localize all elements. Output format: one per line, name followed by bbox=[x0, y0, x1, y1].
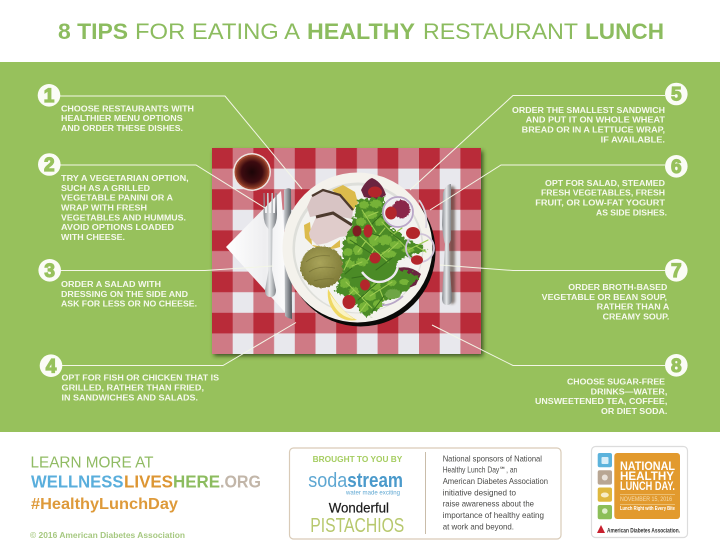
title: LUNCH bbox=[585, 19, 664, 44]
website address: WELLNESS bbox=[31, 471, 124, 491]
panel: green tips background bbox=[0, 62, 720, 432]
icon: knife bbox=[442, 184, 455, 305]
meat slice lower bbox=[309, 213, 353, 245]
tip 6 text bbox=[535, 178, 667, 218]
badge 2: 2 bbox=[44, 155, 55, 176]
tip 6 bbox=[535, 155, 688, 218]
tip 3 text: DRESSING ON THE SIDE AND bbox=[61, 289, 188, 299]
tip 8 text bbox=[535, 376, 667, 416]
tip 2 text bbox=[61, 173, 189, 242]
tip 4 text bbox=[62, 373, 219, 403]
napkin bbox=[226, 191, 291, 319]
tip 6 text: OPT FOR SALAD, STEAMED bbox=[545, 178, 665, 188]
badge 4: 4 bbox=[46, 356, 57, 377]
lettuce base bbox=[335, 198, 428, 318]
purple leaves bbox=[346, 178, 421, 292]
badge 1: 1 bbox=[44, 86, 55, 107]
tip 1 text: AND ORDER THESE DISHES. bbox=[61, 123, 183, 133]
title bbox=[58, 19, 664, 44]
tip 4 text: IN SANDWICHES AND SALADS. bbox=[62, 393, 198, 403]
illustration: table setting bbox=[212, 148, 483, 356]
logo card: National Healthy Lunch Day bbox=[592, 446, 688, 538]
tip 8 text: UNSWEETENED TEA, COFFEE, bbox=[535, 396, 667, 406]
logo: American Diabetes Association: American Diabetes Association. bbox=[607, 528, 680, 534]
learn more heading: LEARN MORE AT bbox=[30, 455, 154, 472]
panel: sponsors bbox=[290, 448, 561, 539]
badge 5 bbox=[665, 83, 688, 106]
tip 1 bbox=[38, 84, 194, 133]
icon: dinner knife beside napkin bbox=[284, 188, 292, 319]
tip 3 text bbox=[61, 279, 197, 309]
orange event panel: HEALTHY bbox=[620, 471, 674, 483]
tip 5 text bbox=[512, 105, 666, 144]
copyright: © 2016 American Diabetes Association bbox=[30, 531, 185, 540]
logo: sodastream: soda bbox=[308, 469, 348, 492]
meat slice upper bbox=[307, 190, 353, 219]
sponsors heading: BROUGHT TO YOU BY bbox=[313, 455, 403, 464]
badge 6: 6 bbox=[671, 157, 682, 178]
onion rings bbox=[362, 197, 434, 305]
tip 1 text: CHOOSE RESTAURANTS WITH bbox=[61, 103, 194, 113]
orange event panel: NATIONAL bbox=[620, 461, 675, 473]
badge 2 bbox=[38, 153, 61, 176]
sponsor description: importance of healthy eating bbox=[443, 511, 544, 520]
tip 4 text: OPT FOR FISH OR CHICKEN THAT IS bbox=[62, 373, 219, 383]
tip 8 bbox=[535, 354, 688, 416]
tomatoes bbox=[342, 186, 423, 309]
orange event panel: Lunch Right with Every Bite bbox=[620, 506, 675, 512]
tip 7 text: RATHER THAN A bbox=[597, 302, 669, 312]
footer: learn more bbox=[30, 455, 261, 540]
sponsor description: raise awareness about the bbox=[443, 500, 534, 509]
squash bbox=[304, 185, 358, 249]
tip 2 text: WRAP WITH FRESH bbox=[61, 202, 147, 212]
logo: sodastream: water made exciting bbox=[345, 490, 400, 496]
tip 3 bbox=[38, 259, 197, 309]
tip 4 text: GRILLED, RATHER THAN FRIED, bbox=[62, 383, 204, 393]
sponsor description: National sponsors of National bbox=[443, 454, 542, 463]
badge 5: 5 bbox=[671, 85, 682, 106]
badge 6 bbox=[665, 155, 688, 178]
tip 2 text: VEGETABLE PANINI OR A bbox=[61, 193, 173, 203]
tip 7 text bbox=[542, 282, 669, 321]
badge 1 bbox=[38, 84, 60, 107]
placemat bbox=[212, 148, 483, 356]
title: 8 TIPS bbox=[58, 19, 128, 44]
tip 2 text: SUCH AS A GRILLED bbox=[61, 183, 150, 193]
tip 2 text: WITH CHEESE. bbox=[61, 232, 125, 242]
icon: sauce cup bbox=[233, 153, 271, 191]
leader lines bbox=[58, 96, 665, 366]
potato mound bbox=[300, 246, 344, 288]
sponsor description: American Diabetes Association bbox=[443, 477, 548, 486]
food: salad bbox=[335, 178, 434, 318]
tip 4 bbox=[40, 354, 219, 403]
tip 5 bbox=[512, 83, 688, 144]
website address: HERE bbox=[173, 471, 220, 491]
sponsor description: initiative designed to bbox=[443, 488, 516, 497]
tip 5 text: AND PUT IT ON WHOLE WHEAT bbox=[526, 115, 666, 125]
tip 3 text: ASK FOR LESS OR NO CHEESE. bbox=[61, 299, 197, 309]
logo: wonderful pistachios: Wonderful bbox=[329, 501, 389, 516]
sponsor description: at work and beyond. bbox=[443, 523, 514, 532]
website address bbox=[31, 471, 261, 491]
badge 7 bbox=[665, 259, 688, 282]
sponsor description bbox=[443, 454, 548, 532]
icon: fork bbox=[264, 193, 277, 297]
badge 4 bbox=[40, 354, 62, 377]
tip 2 bbox=[38, 153, 189, 242]
tip 2 text: VEGETABLES AND HUMMUS. bbox=[61, 212, 186, 222]
logo: sodastream bbox=[308, 469, 403, 496]
plate bbox=[282, 172, 436, 326]
tip 1 text bbox=[61, 103, 194, 133]
cranberry bbox=[392, 200, 410, 218]
lemon wedge bbox=[328, 289, 357, 320]
tip 5 text: BREAD OR IN A LETTUCE WRAP, bbox=[522, 125, 665, 135]
arugula strokes bbox=[344, 210, 428, 312]
logo: wonderful pistachios: PISTACHIOS bbox=[310, 515, 404, 537]
tip 7 text: VEGETABLE OR BEAN SOUP, bbox=[542, 292, 667, 302]
tip 8 text: OR DIET SODA. bbox=[601, 406, 667, 416]
orange event panel: NOVEMBER 15, 2016 bbox=[620, 497, 673, 503]
tip 6 text: FRUIT, OR LOW-FAT YOGURT bbox=[535, 198, 666, 208]
badge 3 bbox=[38, 259, 61, 282]
title: FOR EATING A bbox=[135, 19, 300, 44]
divider bbox=[425, 452, 426, 534]
badge 7: 7 bbox=[671, 261, 682, 282]
tip 6 text: AS SIDE DISHES. bbox=[596, 208, 667, 218]
tip 6 text: FRESH VEGETABLES, FRESH bbox=[541, 188, 665, 198]
badge 3: 3 bbox=[44, 261, 55, 282]
badge 8 bbox=[665, 354, 688, 377]
tip 2 text: TRY A VEGETARIAN OPTION, bbox=[61, 173, 189, 183]
logo: wonderful pistachios bbox=[310, 501, 404, 537]
tip 7 text: ORDER BROTH-BASED bbox=[568, 282, 667, 292]
lettuce highlights bbox=[340, 200, 414, 312]
tip 1 text: HEALTHIER MENU OPTIONS bbox=[61, 113, 183, 123]
orange event panel bbox=[614, 453, 680, 519]
tip 5 text: ORDER THE SMALLEST SANDWICH bbox=[512, 105, 665, 115]
food: meat slices and sides bbox=[300, 185, 358, 320]
logo: sodastream: stream bbox=[347, 469, 403, 492]
tip 8 text: DRINKS—WATER, bbox=[591, 386, 667, 396]
website address: LIVES bbox=[124, 471, 173, 491]
sponsor description: Healthy Lunch Day℠, an bbox=[443, 466, 518, 475]
hashtag: #HealthyLunchDay bbox=[31, 496, 178, 513]
badge 8: 8 bbox=[671, 356, 682, 377]
website address: .ORG bbox=[220, 471, 261, 491]
icon tiles bbox=[598, 453, 612, 519]
tip 7 text: CREAMY SOUP. bbox=[603, 311, 669, 321]
tip 5 text: IF AVAILABLE. bbox=[601, 134, 665, 144]
tip 2 text: AVOID OPTIONS LOADED bbox=[61, 222, 174, 232]
tip 8 text: CHOOSE SUGAR-FREE bbox=[567, 376, 665, 386]
tip 7 bbox=[542, 259, 688, 321]
title: RESTAURANT bbox=[423, 19, 578, 44]
orange event panel: LUNCH DAY. bbox=[620, 481, 675, 493]
tip 3 text: ORDER A SALAD WITH bbox=[61, 279, 161, 289]
title: HEALTHY bbox=[307, 19, 415, 44]
